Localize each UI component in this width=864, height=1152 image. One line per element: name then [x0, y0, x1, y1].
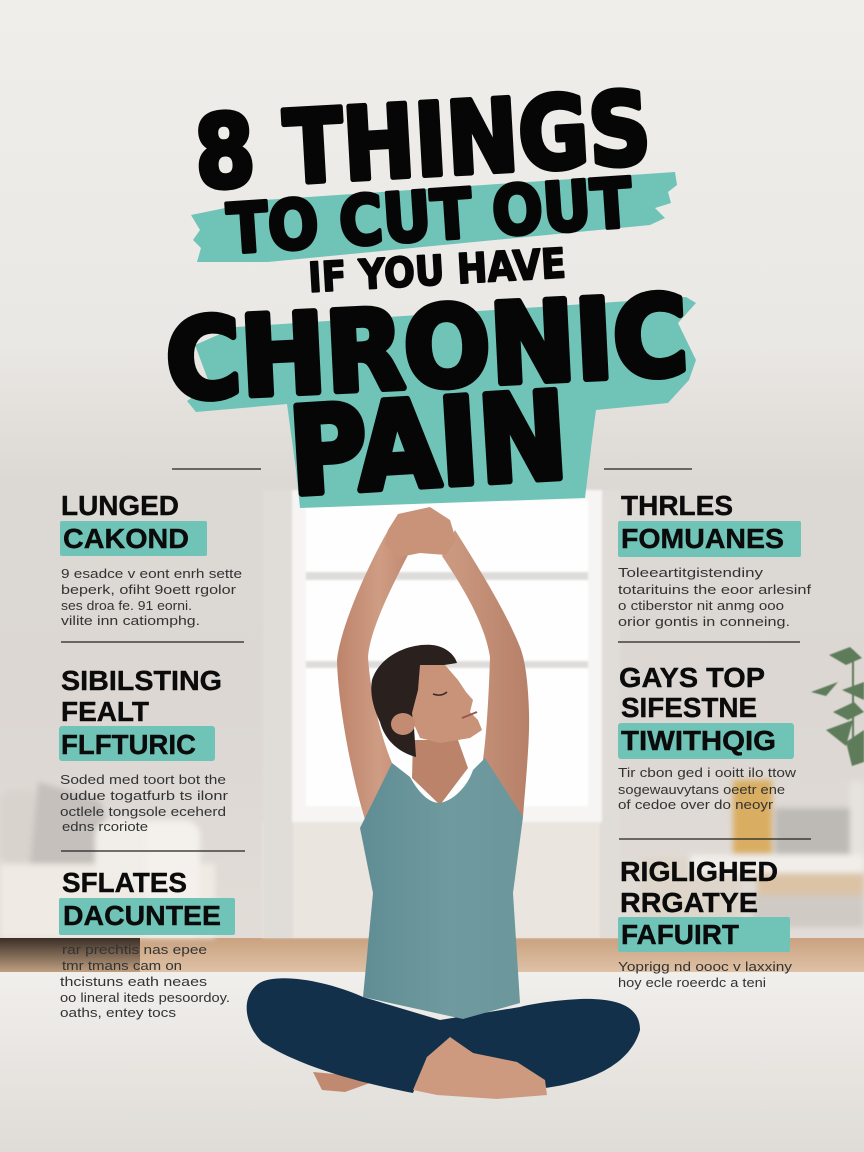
panel: left item 2 [59, 642, 244, 834]
highlighted heading: FAFUIRT [621, 919, 739, 950]
panel: right item 1 [604, 469, 811, 629]
highlight [618, 917, 790, 952]
panel: right item 2: SIFESTNE [621, 692, 757, 723]
body text: hoy ecle roeerdc a teni [618, 975, 766, 990]
body text: octlele tongsole eceherd [60, 804, 226, 819]
body text: o ctiberstor nit anmg ooo [618, 598, 784, 613]
heading: GAYS TOP [619, 662, 765, 693]
sofa shadow on floor [0, 938, 140, 972]
body text [618, 765, 797, 812]
highlighted heading: FOMUANES [621, 523, 784, 554]
side table and decor [640, 780, 864, 935]
body text: orior gontis in conneing. [618, 614, 790, 629]
hair [371, 645, 457, 757]
highlighted heading: CAKOND [63, 523, 189, 554]
body text [60, 772, 229, 834]
body text: totarituins the eoor arlesinf [618, 582, 811, 597]
highlight [618, 521, 801, 557]
body text: Soded med toort bot the [60, 772, 226, 787]
body text: Tir cbon ged i ooitt ilo ttow [618, 765, 797, 780]
body text: vilite inn catiomphg. [61, 613, 200, 628]
icon: potted plant [811, 647, 864, 766]
leggings [247, 978, 640, 1093]
body text: Yoprigg nd oooc v laxxiny [618, 959, 793, 974]
body text [618, 565, 811, 629]
closed eye [433, 692, 447, 695]
title line: if you have: IF YOU HAVE [307, 239, 567, 302]
mouth [462, 712, 477, 718]
highlight [59, 898, 235, 935]
window [262, 490, 620, 938]
heading: SIBILSTING [61, 665, 222, 696]
body text: thcistuns eath neaes [60, 974, 208, 989]
neck and chest [412, 740, 468, 805]
panel: right item 3 [618, 839, 811, 990]
body text: rar prechtis nas epee [62, 942, 207, 957]
title line: 8 things: 8 THINGS [192, 70, 654, 212]
highlight [60, 521, 207, 556]
body text [61, 566, 242, 628]
body text: edns rcoriote [62, 819, 148, 834]
left arm [337, 527, 408, 822]
sofa [0, 782, 215, 938]
heading: SFLATES [62, 867, 187, 898]
body text: beperk, ofiht 9oett rgolor [61, 582, 237, 597]
heading: LUNGED [61, 490, 179, 521]
title: brush strokes [187, 172, 696, 508]
body text: oo lineral iteds pesoordoy. [60, 990, 230, 1005]
face [412, 665, 482, 743]
heading: THRLES [621, 490, 733, 521]
body text: sogewauvytans oeetr ene [618, 782, 785, 797]
body text: tmr tmans cam on [62, 958, 182, 973]
panel: right item 3: RRGATYE [620, 887, 758, 918]
title line: pain: PAIN [285, 367, 571, 523]
panel: left item 3 [59, 851, 245, 1020]
panel: left item 2: FEALT [61, 696, 149, 727]
body text: Toleeartitgistendiny [618, 565, 764, 580]
highlighted heading: DACUNTEE [63, 900, 221, 931]
back foot [313, 1072, 370, 1092]
title [163, 70, 691, 523]
title line: chronic: CHRONIC [163, 272, 691, 425]
highlighted heading: FLFTURIC [61, 729, 196, 760]
body text: of cedoe over do neoyr [618, 797, 774, 812]
panel: right item 2 [618, 642, 800, 812]
body text: oudue togatfurb ts ilonr [60, 788, 229, 803]
front foot [413, 1037, 547, 1099]
highlight [618, 723, 794, 759]
body text: oaths, entey tocs [60, 1005, 177, 1020]
ear [391, 713, 415, 735]
highlighted heading: TIWITHQIG [621, 725, 776, 756]
body text: 9 esadce v eont enrh sette [61, 566, 242, 581]
body text [618, 959, 793, 990]
title line: to cut out: TO CUT OUT [225, 164, 635, 270]
clasped hands [385, 507, 456, 557]
body text [60, 942, 230, 1020]
heading: RIGLIGHED [620, 856, 778, 887]
right arm [442, 530, 529, 817]
panel: left item 1 [60, 469, 261, 628]
highlight [59, 726, 215, 761]
body text: ses droa fe. 91 eorni. [61, 598, 192, 613]
tank top [360, 758, 523, 1019]
illustration: woman stretching [247, 507, 640, 1099]
